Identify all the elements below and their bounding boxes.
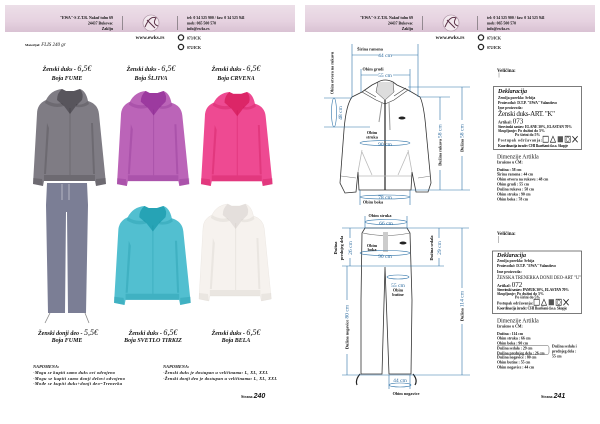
note left: NAPOMENA: — [32, 364, 60, 369]
declaration box jacket: Ime proizvoda: — [498, 106, 523, 110]
declaration box jacket: Proizvođač: D.T.P. "EWA" Valandovo — [498, 101, 557, 105]
dimensions list pants: Dužina : 114 cm — [497, 332, 524, 336]
header band left: info@ewks.rs — [187, 27, 210, 31]
header band right: mob: 065 500 570 — [487, 22, 516, 26]
page number 241: Strana 241 — [541, 393, 565, 400]
size info jacket — [497, 69, 516, 78]
declaration box jacket: Zemlja porekla: Srbija — [498, 96, 535, 100]
caption bottom 3: Boja BELA — [221, 338, 250, 344]
bracket note: Dužina sedala i — [552, 344, 577, 348]
declaration box pants: Po širini do 5% — [515, 296, 540, 300]
caption top 2 — [126, 64, 176, 82]
jacket grey — [33, 89, 106, 186]
declaration box pants: Postupak održavanja: — [497, 302, 533, 306]
dimension labels: 44 cm — [393, 378, 408, 384]
caption top 3 — [211, 64, 261, 82]
declaration box pants: Proizvođač: D.T.P. "EWA" Valandovo — [497, 264, 556, 268]
declaration box pants: Zemlja porekla: Srbija — [497, 259, 534, 263]
dimension labels: Dužina rukava 58 cm — [438, 124, 444, 166]
caption bottom 3: Ženski duks - 6,5€ — [211, 328, 261, 337]
page 240 — [5, 5, 295, 400]
caption top 3: Ženski duks - 6,5€ — [211, 64, 261, 73]
declaration box jacket — [494, 86, 582, 150]
declaration box jacket: Koordinacija izrade: CHI Ikarišani d.o.o. Skopje — [498, 144, 568, 148]
dimension labels: Obim grudi — [362, 66, 384, 72]
declaration box pants: Koordinacija izrade: CHI Ikarišani d.o.o. Skopje — [497, 306, 567, 310]
caption bottom 2: Boja SVETLO TIRKIZ — [123, 338, 182, 344]
dimension labels — [330, 46, 466, 204]
bracket note: 55 cm — [552, 354, 562, 358]
dimension labels: prednjeg dela — [339, 235, 344, 260]
dimensions list jacket: Dužina : 58 cm — [497, 168, 522, 172]
article codes: 073/ICK — [187, 36, 201, 40]
dimensions list pants: Dužina prednjeg dela : 26 cm — [497, 352, 545, 356]
declaration box pants: Sirovinski sastav: PAMUK 30%, ELASTAN 70% — [497, 288, 569, 292]
header band left — [5, 5, 295, 32]
article codes: 072/ICK — [187, 46, 201, 50]
pants line art — [356, 228, 416, 385]
dimensions list jacket: Obim boka : 78 cm — [497, 198, 529, 202]
declaration box pants: Artikal: 072 — [497, 281, 523, 289]
header band left: "EWA"-S Z.T.R. Nakuf tulm 69 — [60, 16, 113, 20]
dimension lines — [342, 216, 470, 389]
jacket purple — [117, 91, 189, 186]
declaration box jacket: Deklaracija — [497, 89, 527, 95]
dimension labels: 55 cm — [391, 283, 406, 289]
caption top 1: Ženski duks - 6,5€ — [42, 64, 92, 73]
header band right — [305, 5, 595, 32]
dimension labels: 48 cm — [338, 105, 344, 120]
header band left: 24437 Bukovac — [88, 22, 113, 26]
caption top 2: Ženski duks - 6,5€ — [126, 64, 176, 73]
dimension labels: 66 cm — [379, 221, 394, 227]
dimension labels: 90 cm — [378, 142, 393, 148]
dimension labels: Dužina nogavice 80 cm — [344, 304, 350, 349]
page 241 — [305, 5, 595, 400]
dimensions list jacket: Izraženo u CM: — [497, 160, 523, 164]
note right: -Ženski donji deo je dostupan u veličinama: L, XL, XXL — [163, 376, 277, 381]
dimension labels: Dužina — [333, 241, 338, 254]
note left — [32, 364, 126, 386]
page number 240: Strana 240 — [241, 393, 265, 400]
caption bottom 2: Ženski duks - 6,5€ — [128, 328, 178, 337]
article codes: 073/ICK — [487, 36, 501, 40]
note right: NAPOMENA: — [162, 364, 190, 369]
dimension labels: 90 cm — [378, 254, 393, 260]
caption top 1 — [42, 64, 92, 82]
article codes — [178, 35, 201, 50]
dimension labels: Obim — [393, 288, 404, 292]
dimensions list pants: Obim nogavice : 44 cm — [497, 366, 535, 370]
website: www.ewks.rs — [136, 35, 164, 41]
pants grey — [45, 183, 89, 323]
header band right: Zaklju — [402, 27, 414, 31]
dimensions list jacket: Obim grudi : 55 cm — [497, 182, 530, 186]
dimension labels: butine — [392, 292, 404, 297]
dimension labels: Dužina sedala — [429, 235, 434, 261]
declaration box jacket: Postupak održavanja: — [498, 138, 542, 142]
dimensions list jacket: Širina ramena : 44 cm — [497, 172, 534, 176]
size info pants: Veličina: — [497, 232, 516, 237]
declaration box pants — [492, 251, 582, 314]
dimension labels: Širina ramena — [357, 46, 384, 52]
dimensions list pants: Obim boka : 90 cm — [497, 342, 529, 346]
dimensions list pants: Dimenzije Artikla — [497, 318, 539, 324]
header band left: mob: 065 500 570 — [187, 22, 216, 26]
dimension labels: 78 cm — [378, 195, 393, 201]
jacket white — [199, 204, 271, 301]
material: Materijal: FLIS 240 gr — [25, 43, 66, 48]
header band right: info@ewks.rs — [487, 27, 510, 31]
article codes — [478, 35, 501, 50]
dimension labels: Obim boka — [363, 200, 384, 204]
header band right: 24437 Bukovac — [388, 22, 413, 26]
dimension labels: Obim otvora na rukavu — [330, 51, 334, 94]
article codes: 072/ICK — [487, 46, 501, 50]
size info pants — [497, 232, 516, 243]
declaration box pants: Ime proizvoda: — [497, 270, 522, 274]
jacket line art — [340, 80, 431, 193]
website: www.ewks.rs — [436, 35, 464, 41]
declaration box jacket: Skupljanje: Po dužini do 5% — [498, 129, 545, 133]
dimension labels: Dužina 58 cm — [460, 124, 466, 152]
dimension labels: Obim nogavice — [393, 391, 420, 396]
dimension labels: struka — [366, 134, 379, 140]
dimensions list pants — [497, 318, 545, 370]
declaration box jacket: Ženski duks-ART. "K" — [498, 110, 555, 118]
dimensions list jacket — [497, 154, 549, 202]
dimension labels: 44 cm — [378, 53, 393, 59]
header band left: tel: 0 34 525 900 / fax: 0 34 525 941 — [187, 16, 245, 20]
header band left: Zaklju — [102, 27, 114, 31]
dimensions list jacket: Dimenzije Artikla — [497, 154, 539, 160]
bracket note — [497, 344, 577, 358]
dimensions list pants: Dužina nogavice : 80 cm — [497, 356, 537, 360]
caption top 2: Boja ŠLJIVA — [133, 74, 168, 82]
caption bottom 1: Boja FUME — [51, 338, 82, 344]
note right: -Ženski duks je dostupan u veličinama: L, XL, XXL — [163, 370, 268, 375]
dimension labels: 55 cm — [378, 73, 393, 79]
dimension labels: boka — [368, 247, 377, 252]
header band right: tel: 0 34 525 900 / fax: 0 34 525 941 — [487, 16, 545, 20]
caption top 3: Boja CRVENA — [216, 76, 255, 82]
technical drawing: pants — [333, 213, 470, 396]
header band right: "EWA"-S Z.T.R. Nakuf tulm 69 — [360, 16, 413, 20]
dimension labels: Obim — [367, 243, 378, 248]
dimension lines — [324, 44, 470, 205]
dimension labels — [333, 213, 466, 396]
size info jacket: Veličina: — [497, 69, 516, 74]
dimensions list pants: Izraženo u CM: — [497, 324, 523, 328]
caption bottom 2 — [123, 328, 182, 344]
dimension labels: 26 cm — [348, 240, 354, 255]
dimension labels: Dužina 114 cm — [460, 290, 466, 321]
jacket pink — [201, 92, 273, 186]
bracket note: prednjeg dela : — [552, 350, 576, 354]
declaration box pants: ŽENSKA TRENERKA DONJI DEO-ART "U" — [497, 275, 581, 281]
dimensions list pants: Obim struka : 66 cm — [497, 336, 531, 340]
declaration box pants: Skupljanje: Po dužini do 5% — [497, 292, 544, 296]
declaration box jacket: Po širini do 5% — [515, 133, 540, 137]
dimension labels: 29 cm — [437, 240, 443, 255]
dimensions list jacket: Obim struka : 90 cm — [497, 192, 531, 196]
technical drawing: jacket — [324, 44, 470, 205]
caption bottom 1 — [37, 328, 99, 344]
dimension labels: Obim struka — [369, 213, 392, 218]
note left: -Mogu se kupiti samo duks ovi odvojeno — [33, 370, 116, 375]
note right — [162, 364, 277, 381]
caption bottom 1: Ženski donji deo - 5,5€ — [37, 328, 99, 337]
dimensions list jacket: Dužina rukava : 58 cm — [497, 188, 535, 192]
caption bottom 3 — [211, 328, 261, 344]
dimension labels: Obim — [367, 130, 378, 135]
caption top 1: Boja FUME — [51, 76, 82, 82]
jacket teal — [114, 206, 191, 305]
declaration box jacket: Artikal: 073 — [498, 118, 524, 126]
dimensions list jacket: Obim otvora na rukavu : 48 cm — [497, 178, 549, 182]
note left: -Mođe se kupiti duks+donji deo=Trenerka — [33, 381, 123, 386]
dimensions list pants: Obim butine : 55 cm — [497, 360, 531, 364]
dimensions list pants: Dužina sedala : 29 cm — [497, 346, 533, 350]
declaration box jacket: Sirovinski sastav: ELANE 30%, ELASTAN 70% — [498, 125, 572, 129]
declaration box pants: Deklaracija — [496, 253, 526, 259]
note left: -Mogu se kupiti samo donji delovi odvojeno — [33, 376, 126, 381]
